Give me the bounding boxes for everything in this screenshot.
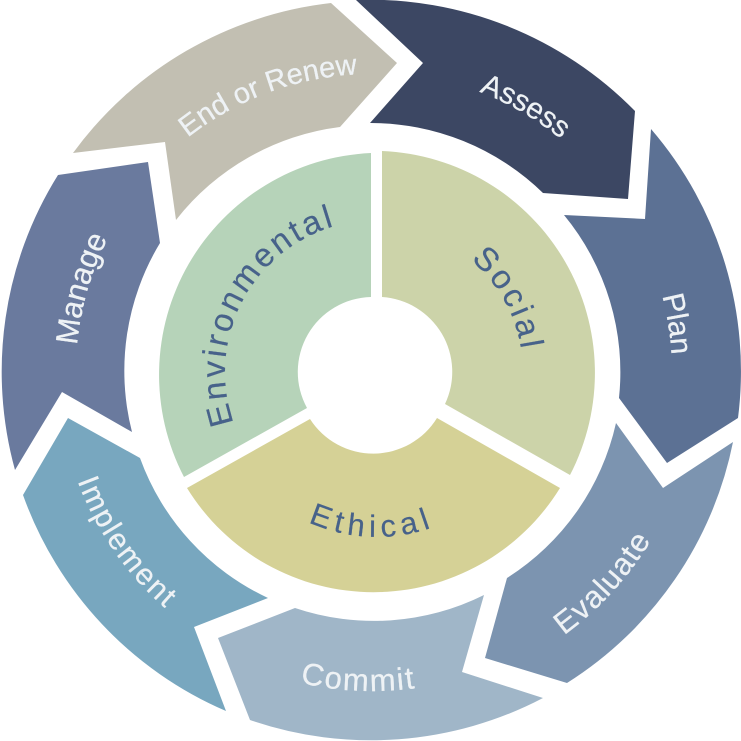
segment: Environmental: Environmental: [202, 204, 332, 427]
arrow: Manage: [2, 162, 160, 470]
arrow: Implement: [23, 418, 268, 711]
arrow: Implement: Implement: [78, 476, 176, 608]
segment: Social: [382, 151, 595, 475]
arrow: Plan: [564, 129, 741, 463]
arrow: Commit: Commit: [303, 664, 415, 692]
arrow: Assess: Assess: [479, 76, 568, 137]
segment: Social: Social: [474, 248, 544, 347]
arrow: Plan: Plan: [662, 293, 689, 354]
arrow: End or Renew: [73, 3, 397, 220]
arrow: End or Renew: End or Renew: [178, 58, 356, 136]
arrow: Manage: Manage: [56, 234, 106, 343]
segment: Ethical: Ethical: [310, 503, 430, 537]
arrow: Assess: [356, 0, 635, 199]
segment: Ethical: [187, 418, 560, 592]
segment: Environmental: [159, 153, 371, 477]
arrow: Evaluate: [485, 423, 733, 683]
arrow: Commit: [218, 595, 543, 740]
arrow: Evaluate: Evaluate: [552, 535, 648, 634]
